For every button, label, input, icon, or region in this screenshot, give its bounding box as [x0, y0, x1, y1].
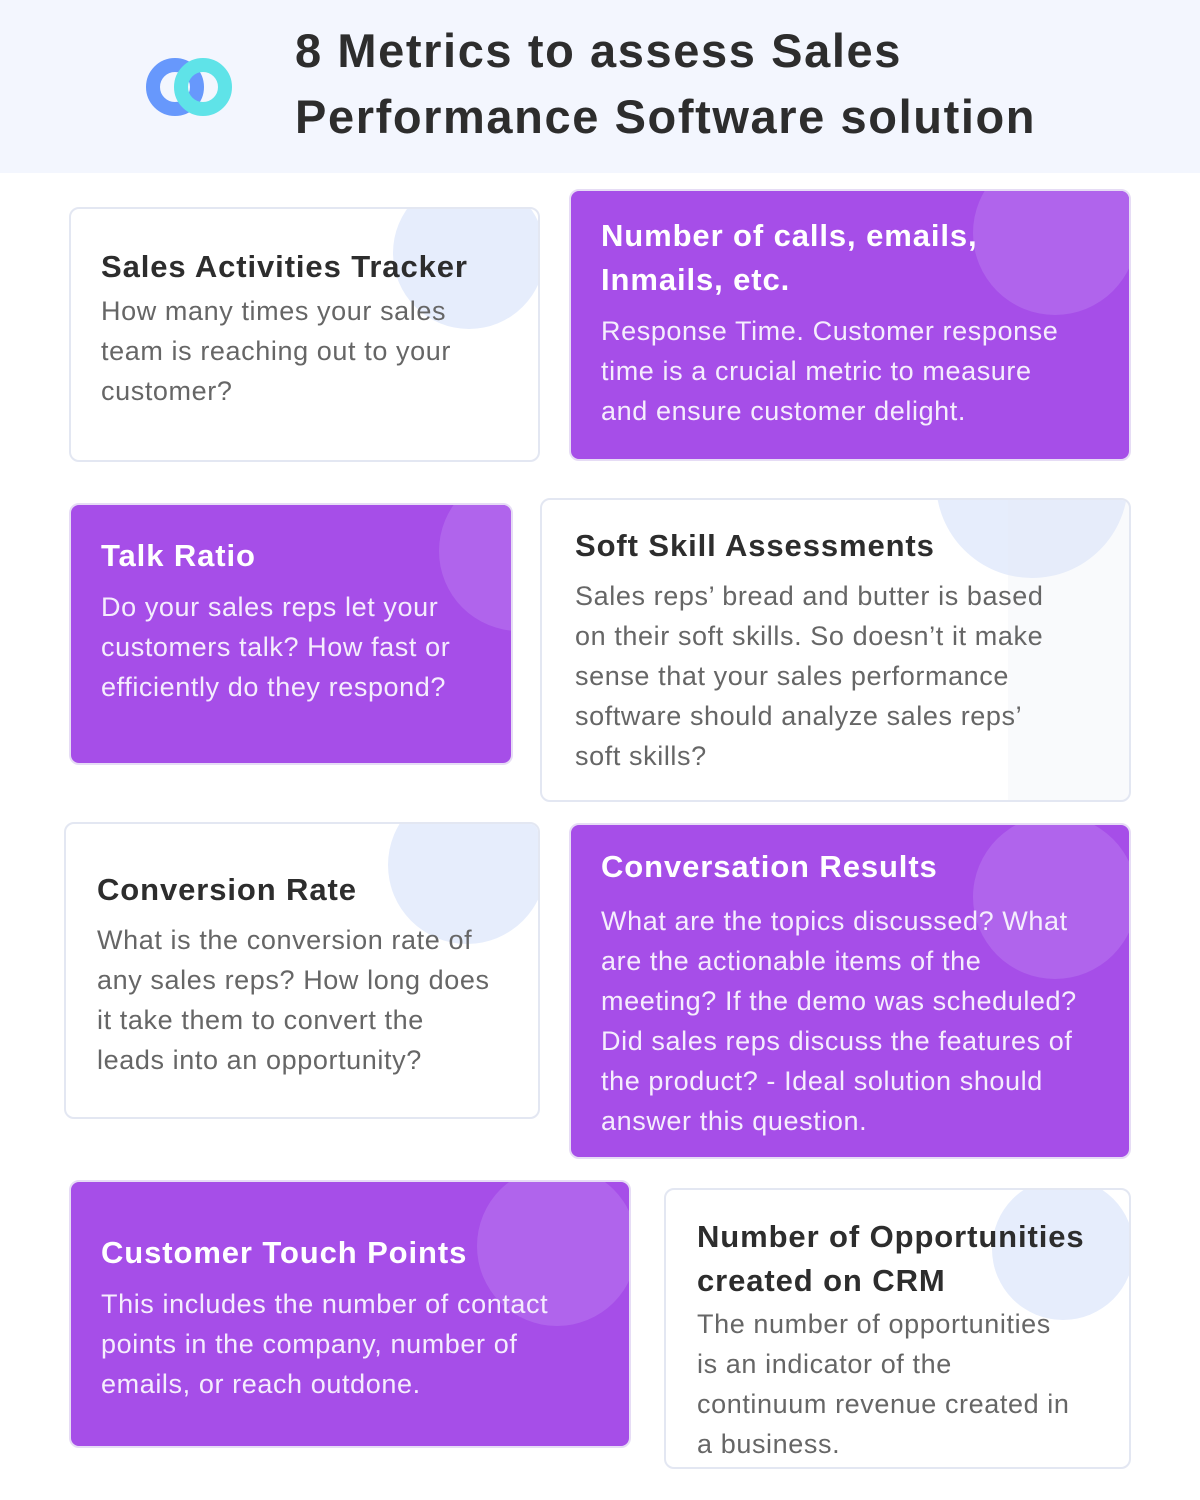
panel: talk ratio	[69, 503, 513, 765]
body text: are the actionable items of the	[601, 946, 981, 976]
body text: any sales reps? How long does	[97, 965, 490, 995]
body text: continuum revenue created in	[697, 1389, 1070, 1419]
body text: What are the topics discussed? What	[601, 906, 1068, 936]
body text: meeting? If the demo was scheduled?	[601, 986, 1077, 1016]
body text	[101, 592, 450, 702]
heading: Inmails, etc.	[601, 262, 790, 297]
body text: This includes the number of contact	[101, 1289, 548, 1319]
heading: Conversation Results	[601, 849, 938, 884]
body text	[601, 906, 1077, 1136]
body text: time is a crucial metric to measure	[601, 356, 1032, 386]
body text: software should analyze sales reps’	[575, 701, 1022, 731]
body text: leads into an opportunity?	[97, 1045, 422, 1075]
heading: Customer Touch Points	[101, 1235, 467, 1270]
body text: a business.	[697, 1429, 840, 1459]
body text	[575, 581, 1043, 771]
body text: soft skills?	[575, 741, 707, 771]
body text: the product? - Ideal solution should	[601, 1066, 1043, 1096]
icon: logo rings	[146, 58, 232, 116]
body text: points in the company, number of	[101, 1329, 517, 1359]
heading: Number of Opportunities	[697, 1219, 1085, 1254]
heading: Talk Ratio	[101, 538, 256, 573]
body text: answer this question.	[601, 1106, 867, 1136]
heading: created on CRM	[697, 1263, 946, 1298]
body text: Response Time. Customer response	[601, 316, 1058, 346]
body text: emails, or reach outdone.	[101, 1369, 421, 1399]
body text: Do your sales reps let your	[101, 592, 438, 622]
heading: Soft Skill Assessments	[575, 528, 935, 563]
body text: The number of opportunities	[697, 1309, 1051, 1339]
heading	[697, 1219, 1085, 1298]
body text: What is the conversion rate of	[97, 925, 472, 955]
body text: Sales reps’ bread and butter is based	[575, 581, 1043, 611]
title	[295, 24, 1036, 143]
panel: conversation results	[569, 823, 1131, 1159]
body text: Did sales reps discuss the features of	[601, 1026, 1073, 1056]
header band	[0, 0, 1200, 173]
body text: How many times your sales	[101, 296, 446, 326]
panel: number of calls	[569, 189, 1131, 461]
body text: on their soft skills. So doesn’t it make	[575, 621, 1043, 651]
body text	[601, 316, 1058, 426]
body text	[697, 1309, 1070, 1459]
body text: team is reaching out to your	[101, 336, 451, 366]
body text	[97, 925, 490, 1075]
body text: customer?	[101, 376, 232, 406]
body text	[101, 1289, 548, 1399]
heading: Conversion Rate	[97, 872, 357, 907]
body text: efficiently do they respond?	[101, 672, 446, 702]
panel: soft skill assessments	[540, 498, 1131, 802]
title: Performance Software solution	[295, 90, 1036, 143]
panel: opportunities on CRM	[664, 1188, 1131, 1469]
body text: and ensure customer delight.	[601, 396, 966, 426]
body text: sense that your sales performance	[575, 661, 1009, 691]
body text: it take them to convert the	[97, 1005, 424, 1035]
panel: conversion rate	[64, 822, 540, 1119]
panel: customer touch points	[69, 1180, 631, 1448]
body text: is an indicator of the	[697, 1349, 952, 1379]
heading	[601, 218, 978, 297]
body text: customers talk? How fast or	[101, 632, 450, 662]
heading: Sales Activities Tracker	[101, 249, 468, 284]
title: 8 Metrics to assess Sales	[295, 24, 902, 77]
panel: sales activities tracker	[69, 207, 540, 462]
heading: Number of calls, emails,	[601, 218, 978, 253]
body text	[101, 296, 451, 406]
